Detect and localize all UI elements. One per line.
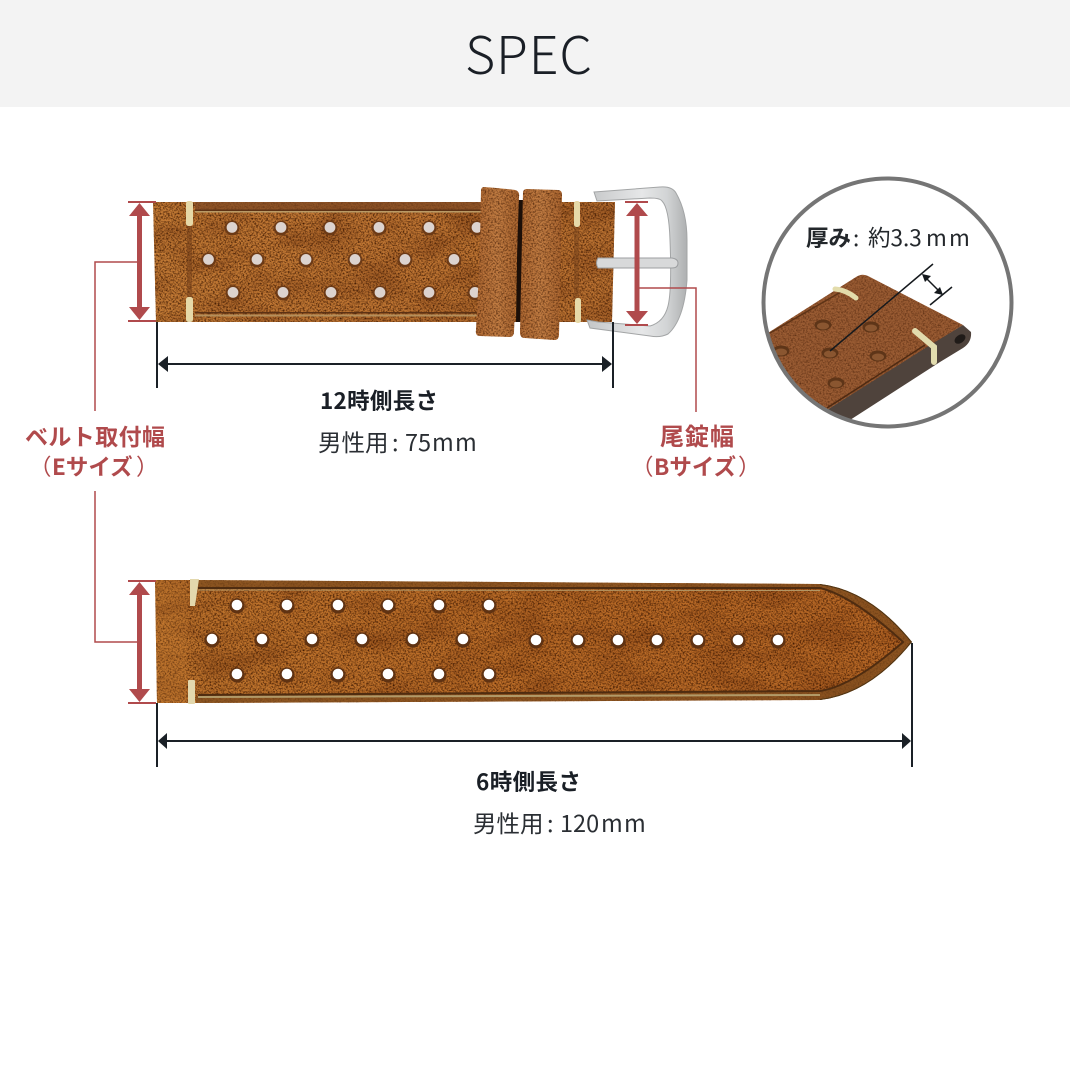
value: 6 o'clock length: : (547, 805, 554, 839)
top strap holes (201, 221, 484, 300)
strap keepers (476, 187, 562, 340)
value: 12 o'clock length: m (432, 424, 454, 458)
title: SPEC (465, 14, 592, 89)
red arrow: buckle width (625, 201, 648, 326)
bottom strap (150, 578, 920, 708)
header band (0, 0, 1070, 107)
label: buckle width: Bサイズ (654, 450, 736, 482)
value: 6 o'clock length: 120 (560, 805, 599, 839)
black dimension: 6 o'clock length (156, 643, 913, 767)
detail circle strap image (769, 274, 972, 419)
bottom strap stitches (188, 579, 199, 704)
buckle frame (587, 187, 687, 337)
label: 6 o'clock length: 6時側長さ (476, 765, 581, 797)
label: belt attachment width: Eサイズ (52, 450, 133, 482)
top strap stitches (186, 201, 581, 323)
value: 6 o'clock length: m (624, 805, 646, 839)
value: 12 o'clock length: : (392, 424, 399, 458)
label: buckle width: ） (738, 450, 761, 482)
thickness label: m (926, 221, 947, 253)
red leader line: buckle width (639, 288, 696, 412)
thickness detail circle (760, 178, 1012, 430)
label: 12 o'clock length: 12時側長さ (320, 384, 438, 416)
top strap leather (150, 200, 620, 324)
red leader line: belt width bottom (95, 491, 137, 642)
label: buckle width: （ (631, 450, 654, 482)
bottom strap holes (204, 598, 786, 683)
label: buckle width: 尾錠幅 (660, 417, 734, 452)
red leader line: belt width top (95, 262, 137, 411)
thickness label: 厚み (806, 221, 851, 253)
value: 6 o'clock length: m (601, 805, 623, 839)
label: belt attachment width: ） (136, 450, 159, 482)
thickness dimension lines (830, 264, 952, 351)
thickness label: : (853, 221, 859, 253)
bottom strap leather (150, 578, 920, 708)
black dimension: 12 o'clock length (156, 322, 614, 388)
label: buckle width (631, 417, 761, 482)
thickness label: m (949, 221, 970, 253)
value: 12 o'clock length: 男性用 (318, 424, 388, 458)
thickness label: 約3.3 (868, 221, 922, 253)
value: 12 o'clock length: m (455, 424, 477, 458)
value: 12 o'clock length: 75 (405, 424, 431, 458)
detail circle outline (764, 178, 1012, 426)
top strap with buckle (150, 187, 687, 340)
label: belt attachment width: （ (29, 450, 52, 482)
red arrow: top strap width (128, 201, 156, 322)
red arrow: bottom strap width (128, 580, 156, 704)
label: belt attachment width: ベルト取付幅 (25, 418, 165, 452)
value: 6 o'clock length: 男性用 (473, 805, 544, 839)
label: belt attachment width (25, 418, 165, 482)
